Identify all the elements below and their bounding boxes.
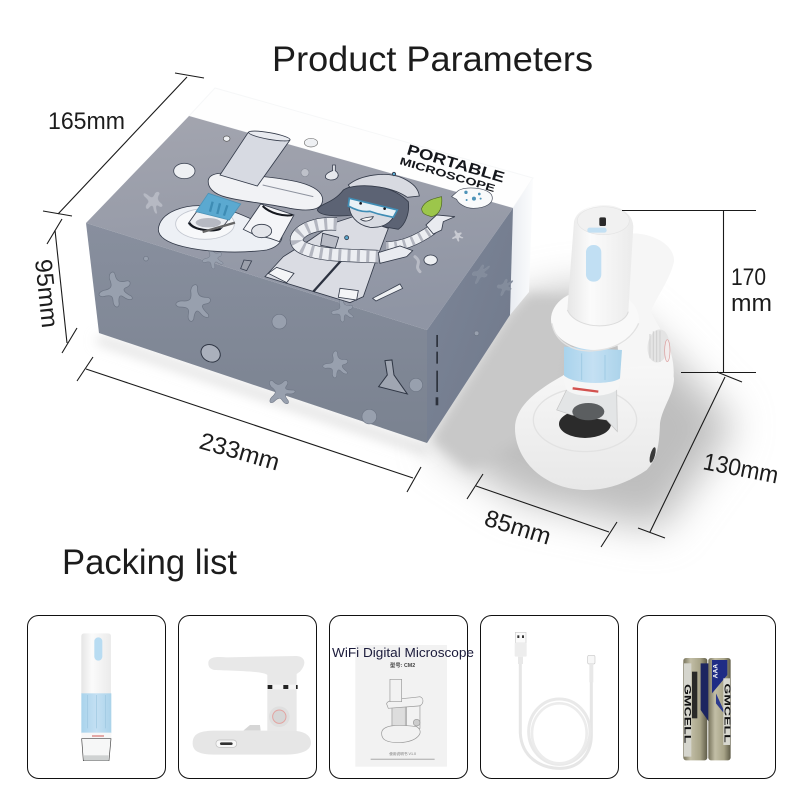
illustrated tube	[220, 132, 290, 186]
manual page	[355, 645, 447, 767]
background floor shadow	[95, 285, 735, 530]
illustrated scientist	[265, 172, 419, 303]
face	[349, 203, 395, 227]
green leaf	[422, 197, 442, 217]
focus knob	[645, 328, 671, 364]
illustrated base	[158, 206, 282, 252]
goggles	[348, 198, 397, 217]
microscope rear arm	[613, 233, 674, 380]
lab coat	[265, 217, 388, 303]
illustrated arm	[208, 173, 323, 210]
dimension 170mm line	[622, 210, 756, 372]
hat	[348, 174, 419, 197]
box artwork	[97, 129, 516, 424]
dimension 233mm line	[77, 357, 421, 492]
box white sleeve top	[189, 88, 533, 208]
dimension 85mm line	[467, 474, 617, 547]
front bubble	[198, 341, 223, 366]
manual page: 使用说明书 V1.0	[389, 751, 416, 756]
card: batteries	[638, 616, 776, 778]
lens cup	[557, 387, 617, 432]
dimension labels: mm	[731, 290, 772, 317]
title: Product Parameters	[272, 40, 593, 79]
box heading	[398, 142, 507, 195]
illustrated stand column	[243, 204, 294, 242]
control buttons	[586, 245, 601, 282]
packing list heading: Packing list	[62, 543, 237, 582]
top ring	[551, 289, 639, 350]
battery right: GMCELL	[723, 683, 733, 744]
box heading: MICROSCOPE	[398, 155, 496, 195]
microscope photo	[515, 205, 674, 490]
box white sleeve side	[510, 178, 533, 315]
dimension labels: 130mm	[701, 448, 781, 489]
usb port	[599, 217, 606, 226]
battery right	[708, 658, 733, 760]
manual overlay title: WiFi Digital Microscope	[332, 645, 474, 660]
blue lens section	[564, 347, 622, 384]
hands	[378, 215, 455, 263]
card: usb cable	[480, 616, 618, 778]
dimension labels: 165mm	[48, 108, 125, 135]
tube body	[567, 205, 633, 326]
side face print marks	[436, 335, 438, 405]
flask on front face	[379, 360, 407, 394]
front and side face decorations	[97, 246, 516, 424]
speech bubble with cells	[452, 188, 492, 208]
dimension labels	[29, 108, 781, 551]
dimension labels: 233mm	[196, 428, 283, 476]
box front face	[86, 223, 427, 443]
stage hole	[559, 410, 611, 438]
hair	[317, 185, 409, 229]
dimension labels: 85mm	[481, 505, 554, 551]
dimension labels: 95mm	[29, 258, 63, 329]
product box	[86, 88, 533, 443]
dimension 95mm line	[47, 219, 77, 353]
dimension 130mm line	[638, 372, 742, 538]
dimension 165mm line	[43, 73, 204, 216]
box top face	[86, 116, 513, 330]
battery right: AAA	[712, 664, 719, 678]
scientist arms	[297, 224, 433, 257]
manual page: 型号: CM2	[390, 661, 415, 669]
illustrated microscope on box	[158, 129, 323, 252]
card: microscope stand	[178, 616, 316, 778]
box side face	[427, 208, 513, 443]
card: user manual	[330, 616, 474, 778]
top face decorations	[139, 136, 463, 301]
lens collar	[563, 375, 620, 396]
card: camera tube	[28, 616, 166, 778]
dimension lines	[43, 73, 756, 547]
illustrated lens	[188, 212, 229, 230]
box heading: PORTABLE	[405, 142, 507, 187]
dimension labels: 170	[731, 264, 766, 291]
battery left: GMCELL	[683, 684, 693, 744]
microscope base	[515, 365, 674, 490]
